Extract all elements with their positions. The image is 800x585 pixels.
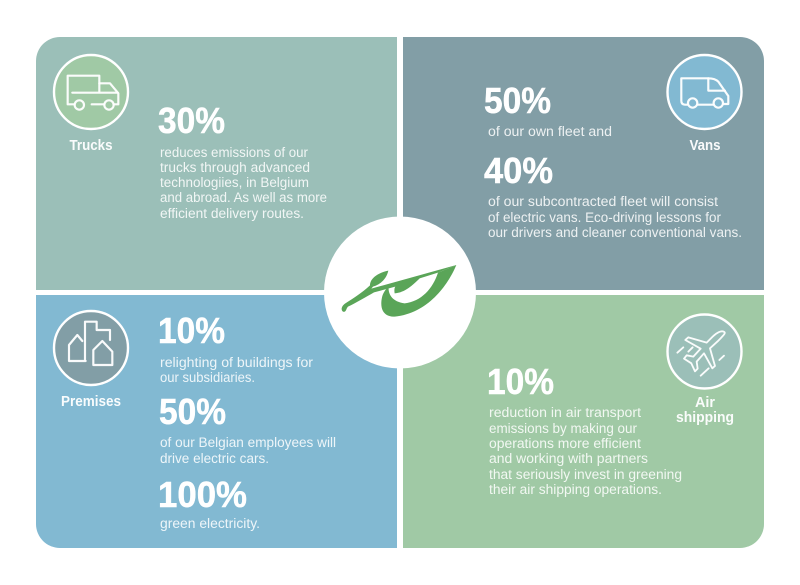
- text: air shipping description: [489, 405, 682, 497]
- text: air shipping description: that seriously invest in greening: [489, 467, 682, 482]
- stat: 10%: 10%: [487, 361, 554, 402]
- text: electric cars: of our Belgian employees will: [160, 435, 336, 450]
- icon: green leaf logo: [342, 265, 456, 317]
- text: trucks description: reduces emissions of our: [160, 145, 308, 160]
- label: air shipping: Air: [695, 395, 715, 411]
- center logo: [324, 216, 476, 368]
- stat: 50%: 50%: [484, 80, 551, 121]
- text: relighting: our subsidiaries.: [160, 370, 255, 385]
- text: vans description: of electric vans. Eco-driving lessons for: [488, 210, 721, 225]
- label: premises: Premises: [61, 394, 121, 410]
- text: electric cars: [160, 435, 336, 466]
- text: vans description: [488, 194, 742, 240]
- icon: buildings: [54, 311, 128, 385]
- panel: premises: [36, 295, 397, 548]
- stat: 30%: 30%: [158, 100, 225, 141]
- text: trucks description: trucks through advanced: [160, 160, 310, 175]
- text: electric cars: drive electric cars.: [160, 451, 269, 466]
- text: trucks description: and abroad. As well as more: [160, 190, 327, 205]
- text: own fleet: of our own fleet and: [488, 124, 612, 139]
- text: air shipping description: their air shipping operations.: [489, 482, 662, 497]
- panel: trucks: [36, 37, 397, 290]
- text: relighting: [160, 355, 314, 385]
- text: air shipping description: reduction in air transport: [489, 405, 641, 420]
- panel: air shipping: [403, 295, 764, 548]
- label: air shipping: shipping: [676, 410, 734, 426]
- label: vans: Vans: [690, 138, 720, 154]
- stat: 40%: 40%: [484, 150, 553, 191]
- label: trucks: Trucks: [70, 138, 112, 154]
- icon: airplane: [668, 314, 742, 388]
- text: air shipping description: emissions by making our: [489, 421, 637, 436]
- text: trucks description: efficient delivery routes.: [160, 206, 304, 221]
- stat: 50%: 50%: [159, 391, 226, 432]
- text: relighting: relighting of buildings for: [160, 355, 314, 370]
- stat: 100%: 100%: [158, 474, 247, 515]
- panel: vans: [403, 37, 764, 290]
- icon: truck: [54, 55, 128, 129]
- text: air shipping description: and working with partners: [489, 451, 648, 466]
- text: vans description: of our subcontracted fleet will consist: [488, 194, 718, 209]
- stat: 10%: 10%: [158, 310, 225, 351]
- text: green electricity: green electricity.: [160, 516, 260, 531]
- text: trucks description: [160, 145, 327, 221]
- text: vans description: our drivers and cleaner conventional vans.: [488, 225, 742, 240]
- icon: van: [668, 55, 742, 129]
- text: trucks description: technologiies, in Belgium: [160, 175, 309, 190]
- text: air shipping description: operations more efficient: [489, 436, 641, 451]
- label: air shipping: [676, 395, 734, 426]
